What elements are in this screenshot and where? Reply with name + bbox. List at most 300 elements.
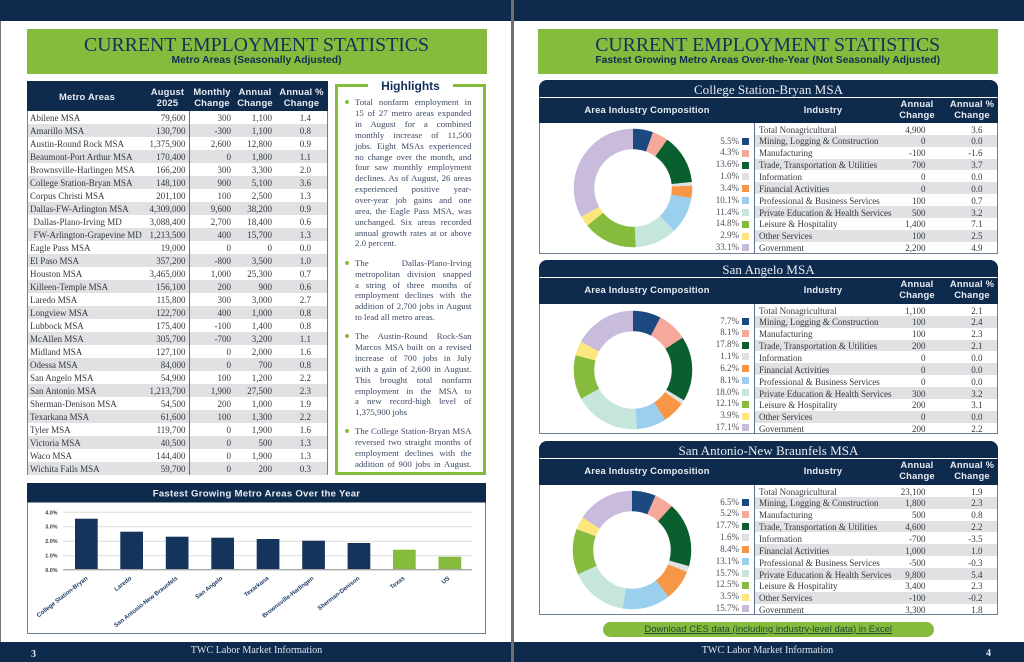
industry table: 23,100 — [901, 486, 926, 496]
industry table: 4,900 — [905, 124, 926, 134]
table rows: 900 — [218, 178, 231, 188]
table rows: Texarkana MSA — [30, 412, 89, 422]
industry table: 0.7 — [971, 196, 982, 206]
industry table: 100 — [912, 317, 926, 327]
x axis labels: Sherman-Denison — [317, 576, 361, 612]
table rows: 9,600 — [211, 204, 231, 214]
highlight 1: area, the Eagle Pass MSA, was — [355, 206, 472, 216]
table rows: Laredo MSA — [30, 295, 77, 305]
title banner: metro areas — [26, 29, 486, 74]
table header: Annual — [238, 86, 271, 97]
industry table: 500 — [912, 208, 926, 218]
table rows: 2.2 — [300, 373, 311, 383]
table rows: Houston MSA — [30, 269, 82, 279]
industry table: Information — [759, 353, 802, 363]
table rows: 2.3 — [300, 386, 311, 396]
legend: 6.2% — [720, 363, 739, 373]
legend: 4.3% — [720, 147, 739, 157]
table rows: Longview MSA — [30, 308, 88, 318]
table rows: 0.8 — [300, 360, 311, 370]
y axis and gridlines — [45, 510, 472, 574]
legend: 3.5% — [720, 591, 739, 601]
subtitle: Fastest Growing Metro Areas Over-the-Year (Not Seasonally Adjusted) — [595, 55, 940, 66]
table rows: 200 — [218, 399, 231, 409]
highlight 2 — [345, 258, 472, 322]
legend: 18.0% — [716, 387, 739, 397]
table rows: 200 — [218, 282, 231, 292]
table rows: 0.7 — [300, 269, 311, 279]
download button — [603, 622, 934, 637]
title banner: fastest growing — [538, 29, 998, 74]
table rows: Victoria MSA — [30, 438, 81, 448]
highlight 2: a string of three months of — [355, 280, 472, 290]
legend: 1.1% — [720, 351, 739, 361]
industry table: 1.0 — [971, 546, 982, 556]
table rows: San Antonio MSA — [30, 386, 97, 396]
table rows: -800 — [214, 256, 231, 266]
industry table: Total Nonagricultural — [759, 486, 837, 496]
title: CURRENT EMPLOYMENT STATISTICS — [84, 34, 429, 56]
industry table: -3.5 — [968, 534, 982, 544]
legend: 15.7% — [716, 603, 739, 613]
industry table: 5.4 — [971, 570, 982, 580]
table header: Change — [194, 97, 230, 108]
table rows: El Paso MSA — [30, 256, 79, 266]
table rows: 2,500 — [252, 191, 272, 201]
industry table: Other Services — [759, 593, 812, 603]
x axis labels: Texarkana — [243, 575, 271, 599]
industry table: -100 — [909, 593, 926, 603]
table rows: 3,200 — [252, 334, 272, 344]
panel title — [539, 260, 998, 277]
industry table: Financial Activities — [759, 365, 829, 375]
industry table: Manufacturing — [759, 329, 812, 339]
highlight 4: The College Station-Bryan MSA — [355, 426, 472, 436]
title: CURRENT EMPLOYMENT STATISTICS — [595, 34, 940, 56]
table rows: 0.0 — [300, 243, 311, 253]
industry table: 0 — [921, 136, 926, 146]
legend: 5.2% — [720, 508, 739, 518]
highlight 3: The Austin-Round Rock-San — [355, 331, 472, 341]
industry table: -700 — [909, 534, 926, 544]
highlight 1: jobs. Eight MSAs experienced — [355, 141, 472, 151]
table rows: 3,465,000 — [150, 269, 186, 279]
industry table: 700 — [912, 160, 926, 170]
table rows: 25,300 — [247, 269, 272, 279]
legend: 1.0% — [720, 171, 739, 181]
table rows: 19,000 — [161, 243, 186, 253]
industry table: 2.1 — [971, 306, 982, 316]
legend: 17.7% — [716, 520, 739, 530]
table rows: 1,100 — [252, 113, 272, 123]
highlight 3: increase of 700 jobs in July — [355, 353, 472, 363]
table rows: 1,213,500 — [150, 230, 186, 240]
panel: highlights box — [334, 84, 486, 475]
highlights heading — [368, 78, 453, 94]
industry table: Private Education & Health Services — [759, 208, 891, 218]
table rows: 119,700 — [157, 425, 186, 435]
table rows: 84,000 — [161, 360, 186, 370]
industry table: -500 — [909, 558, 926, 568]
legend — [716, 136, 749, 252]
column headers: Industry — [804, 284, 842, 295]
donut chart — [574, 128, 692, 248]
table rows: 1.3 — [300, 230, 311, 240]
industry table: 0.0 — [971, 353, 982, 363]
table rows: Austin-Round Rock MSA — [30, 139, 124, 149]
table rows: College Station-Bryan MSA — [30, 178, 132, 188]
industry table: Government — [759, 424, 804, 434]
industry table: 100 — [912, 231, 926, 241]
table header — [27, 81, 328, 111]
table rows: 3,088,400 — [150, 217, 186, 227]
industry table: Financial Activities — [759, 546, 829, 556]
highlight 4: addition of 900 jobs in August. — [355, 459, 472, 469]
table rows: -300 — [214, 126, 231, 136]
table rows: 0 — [226, 243, 231, 253]
left page edge — [0, 0, 1, 662]
industry table: 3,400 — [905, 581, 926, 591]
column headers: Change — [899, 289, 935, 300]
table rows: 0 — [268, 243, 272, 253]
table rows: 0 — [226, 347, 231, 357]
table rows: 54,500 — [161, 399, 186, 409]
industry table: 0 — [921, 377, 926, 387]
table rows: 4,309,000 — [150, 204, 186, 214]
table rows: Killeen-Temple MSA — [30, 282, 108, 292]
legend: 3.4% — [720, 183, 739, 193]
y axis and gridlines: 4.0% — [45, 510, 58, 516]
industry table: 0 — [921, 184, 926, 194]
industry table: 9,800 — [905, 570, 926, 580]
table rows: 3,300 — [252, 165, 272, 175]
table rows: 1,000 — [252, 308, 272, 318]
table header: Change — [237, 97, 273, 108]
table rows: 175,400 — [156, 321, 186, 331]
industry table: 7.1 — [971, 219, 982, 229]
table rows: 59,700 — [161, 464, 186, 474]
table rows: Sherman-Denison MSA — [30, 399, 117, 409]
table rows: 1.6 — [300, 347, 311, 357]
highlight 3: a new record-high level of — [355, 396, 472, 406]
column headers — [539, 459, 998, 484]
industry table: 500 — [912, 510, 926, 520]
highlight 1: 15 of 27 metro areas expanded — [355, 108, 472, 118]
industry table: 1.8 — [971, 605, 982, 615]
legend: 17.8% — [716, 339, 739, 349]
table rows: 2.2 — [300, 412, 311, 422]
table rows: 100 — [218, 412, 231, 422]
column headers: Area Industry Composition — [584, 104, 710, 115]
industry table: -0.2 — [968, 593, 982, 603]
table rows: 1.3 — [300, 438, 311, 448]
industry table: 3.6 — [971, 124, 982, 134]
industry table: Financial Activities — [759, 184, 829, 194]
footer: page 3 — [0, 642, 511, 662]
highlight 2: employment declines with the — [355, 290, 472, 300]
table rows: 166,200 — [156, 165, 186, 175]
table rows: 0.3 — [300, 464, 311, 474]
table rows: 130,700 — [156, 126, 186, 136]
x axis labels: San Antonio-New Braunfels — [113, 575, 180, 629]
industry table: Government — [759, 605, 804, 615]
legend: 5.5% — [720, 136, 739, 146]
industry table: 200 — [912, 400, 926, 410]
column headers — [539, 278, 998, 304]
legend: 13.1% — [716, 556, 739, 566]
y axis and gridlines: 3.0% — [45, 525, 58, 531]
table rows: Corpus Christi MSA — [30, 191, 105, 201]
column headers — [539, 98, 998, 122]
table rows: Brownsville-Harlingen MSA — [30, 165, 135, 175]
legend: 1.6% — [720, 532, 739, 542]
column headers: Change — [954, 289, 990, 300]
table rows: Eagle Pass MSA — [30, 243, 90, 253]
legend: 15.7% — [716, 568, 739, 578]
column headers: Annual — [900, 459, 933, 470]
highlight 1: experienced positive year- — [355, 184, 472, 194]
table rows: 1,200 — [252, 373, 272, 383]
table rows: 1.0 — [300, 256, 311, 266]
legend — [716, 496, 749, 613]
x axis labels — [36, 575, 451, 629]
table rows: 1,800 — [252, 152, 272, 162]
industry table: 0.8 — [971, 510, 982, 520]
table rows: Dallas-FW-Arlington MSA — [30, 204, 129, 214]
highlight 3: employment in the MSA to — [355, 386, 472, 396]
industry table: Trade, Transportation & Utilities — [759, 160, 877, 170]
industry table: 1,400 — [905, 219, 926, 229]
table rows: 122,700 — [156, 308, 186, 318]
table rows: 1.1 — [300, 152, 311, 162]
industry table: Professional & Business Services — [759, 558, 880, 568]
table rows: 2,700 — [211, 217, 231, 227]
highlight 2: The Dallas-Plano-Irving — [355, 258, 472, 268]
footer text: TWC Labor Market Information — [191, 645, 322, 656]
table rows: 0 — [226, 360, 231, 370]
highlight 2: to lead all metro areas. — [355, 312, 435, 322]
table rows: 0.9 — [300, 139, 311, 149]
table rows: 0 — [226, 438, 231, 448]
highlight 4: reversed two straight months of — [355, 437, 472, 447]
legend: 33.1% — [716, 242, 739, 252]
column headers: Annual % — [950, 459, 994, 470]
highlight 1: unchanged. Six areas recorded — [355, 217, 472, 227]
table rows: 1,900 — [252, 451, 272, 461]
table rows: Wichita Falls MSA — [30, 464, 100, 474]
table rows: 127,100 — [156, 347, 186, 357]
industry table: 2.4 — [971, 317, 982, 327]
table rows: 54,900 — [161, 373, 186, 383]
table rows: Tyler MSA — [30, 425, 71, 435]
x axis labels: Laredo — [114, 576, 133, 593]
industry table: Leisure & Hospitality — [759, 400, 838, 410]
column headers: Industry — [804, 104, 842, 115]
industry table: 200 — [912, 341, 926, 351]
panel title — [539, 441, 998, 458]
table rows: 3,500 — [252, 256, 272, 266]
legend: 11.4% — [716, 207, 739, 217]
table rows: Amarillo MSA — [30, 126, 84, 136]
table rows: Dallas-Plano-Irving MD — [34, 217, 122, 227]
industry table: Mining, Logging & Construction — [759, 498, 879, 508]
highlight 3 — [345, 331, 472, 417]
table rows: 200 — [258, 464, 272, 474]
table header: Change — [284, 97, 319, 108]
highlight 1: Total nonfarm employment in — [355, 97, 472, 107]
chart heading — [27, 483, 486, 502]
download button: Download CES data (including industry-level data) in Excel — [644, 624, 892, 635]
table rows: Beaumont-Port Arthur MSA — [30, 152, 132, 162]
table rows: 12,800 — [247, 139, 272, 149]
table rows: 1.1 — [300, 334, 311, 344]
table rows: 2,000 — [252, 347, 272, 357]
industry table: 300 — [912, 389, 926, 399]
legend: 13.6% — [716, 159, 739, 169]
x axis labels: US — [441, 576, 451, 586]
table rows: 0 — [226, 464, 231, 474]
header band: page 3 — [0, 0, 511, 21]
table rows: Abilene MSA — [30, 113, 80, 123]
table rows: -100 — [214, 321, 231, 331]
column headers: Area Industry Composition — [584, 284, 710, 295]
industry table: 3,300 — [905, 605, 926, 615]
table rows: 0.8 — [300, 308, 311, 318]
table rows: 0 — [226, 152, 231, 162]
table rows: 0 — [226, 451, 231, 461]
legend — [716, 316, 749, 432]
table header: 2025 — [157, 97, 178, 108]
legend: 6.5% — [720, 496, 739, 506]
column headers: Industry — [804, 465, 842, 476]
industry table: 0.0 — [971, 365, 982, 375]
legend: 7.7% — [720, 316, 739, 326]
industry table: 0 — [921, 412, 926, 422]
table rows: 156,100 — [156, 282, 186, 292]
column headers: Change — [954, 109, 990, 120]
industry table: Professional & Business Services — [759, 377, 880, 387]
highlight 3: with a gain of 2,600 in August. — [355, 364, 472, 374]
legend: 14.8% — [716, 218, 739, 228]
x axis labels: College Station-Bryan — [36, 576, 89, 619]
highlight 4 — [345, 426, 472, 469]
table rows: 400 — [218, 230, 231, 240]
table rows: 0.6 — [300, 217, 311, 227]
table rows: 357,200 — [156, 256, 186, 266]
column headers: Annual % — [950, 98, 994, 109]
table rows: Waco MSA — [30, 451, 72, 461]
industry table: 4,600 — [905, 522, 926, 532]
page number: 4 — [986, 648, 991, 659]
table header: August — [151, 86, 184, 97]
table rows: 305,700 — [156, 334, 186, 344]
legend: 8.1% — [720, 327, 739, 337]
highlight 3: 1,375,900 jobs — [355, 407, 407, 417]
donut chart — [574, 310, 692, 430]
legend: 2.9% — [720, 230, 739, 240]
highlight 4: employment declines with the — [355, 448, 472, 458]
table rows: 2.0 — [300, 165, 311, 175]
highlights heading: Highlights — [381, 79, 440, 93]
table rows: 115,800 — [157, 295, 186, 305]
industry table: Trade, Transportation & Utilities — [759, 341, 877, 351]
column headers: Annual % — [950, 278, 994, 289]
highlight 1: in August for a combined — [355, 119, 472, 129]
table rows: 1,900 — [211, 386, 231, 396]
legend: 10.1% — [716, 195, 739, 205]
industry table: Information — [759, 534, 802, 544]
table rows: 2.7 — [300, 295, 311, 305]
industry table: Total Nonagricultural — [759, 306, 837, 316]
panel: San Angelo MSA — [539, 260, 998, 434]
x axis labels: Brownsville-Harlingen — [262, 576, 315, 620]
table rows: 300 — [218, 165, 231, 175]
panel: fastest growing bar chart — [27, 483, 486, 634]
table rows: 100 — [218, 191, 231, 201]
highlight 3: This brought total nonfarm — [355, 375, 472, 385]
table rows: 0.6 — [300, 282, 311, 292]
table rows: 3,000 — [252, 295, 272, 305]
table rows: 2,600 — [211, 139, 231, 149]
table rows: Midland MSA — [30, 347, 82, 357]
table rows: 1,400 — [252, 321, 272, 331]
table rows: 500 — [258, 438, 272, 448]
industry table: 2.3 — [971, 329, 982, 339]
table rows: 170,400 — [156, 152, 186, 162]
table rows: 18,400 — [247, 217, 272, 227]
chart heading: Fastest Growing Metro Areas Over the Year — [153, 488, 360, 500]
industry table: -1.6 — [968, 148, 982, 158]
industry table: 0.0 — [971, 377, 982, 387]
industry table: Total Nonagricultural — [759, 124, 837, 134]
highlight 1: declines. As of August, 26 areas — [355, 173, 472, 183]
industry table: Leisure & Hospitality — [759, 219, 838, 229]
table rows: FW-Arlington-Grapevine MD — [34, 230, 142, 240]
gutter between pages — [511, 0, 514, 662]
table rows: 400 — [218, 308, 231, 318]
industry table: 0.0 — [971, 136, 982, 146]
table rows: 1,213,700 — [150, 386, 186, 396]
table rows: 40,500 — [161, 438, 186, 448]
industry table: 4.9 — [971, 243, 982, 253]
panel: San Antonio-New Braunfels MSA — [539, 441, 998, 615]
table rows: 1,000 — [252, 399, 272, 409]
industry table: Other Services — [759, 412, 812, 422]
table rows: -700 — [214, 334, 231, 344]
panel title: San Antonio-New Braunfels MSA — [678, 443, 859, 458]
table header: Monthly — [193, 86, 231, 97]
industry table: Trade, Transportation & Utilities — [759, 522, 877, 532]
legend: 8.4% — [720, 544, 739, 554]
table rows: 3.6 — [300, 178, 311, 188]
table rows: 1,000 — [211, 269, 231, 279]
column headers: Annual — [900, 278, 933, 289]
highlight 1: annual growth rates at or above — [355, 228, 472, 238]
footer: page 4 — [514, 642, 1024, 662]
industry table: 2.5 — [971, 231, 982, 241]
legend: 3.9% — [720, 410, 739, 420]
bars — [63, 519, 472, 570]
highlight 3: Marcos MSA built on a revised — [355, 342, 472, 352]
x axis labels: San Angelo — [195, 576, 224, 601]
column headers: Area Industry Composition — [584, 465, 710, 476]
table rows: 79,600 — [161, 113, 186, 123]
industry table: Government — [759, 243, 804, 253]
industry table: 100 — [912, 196, 926, 206]
table rows: 1.4 — [300, 113, 311, 123]
table rows: Odessa MSA — [30, 360, 78, 370]
industry table: -100 — [909, 148, 926, 158]
